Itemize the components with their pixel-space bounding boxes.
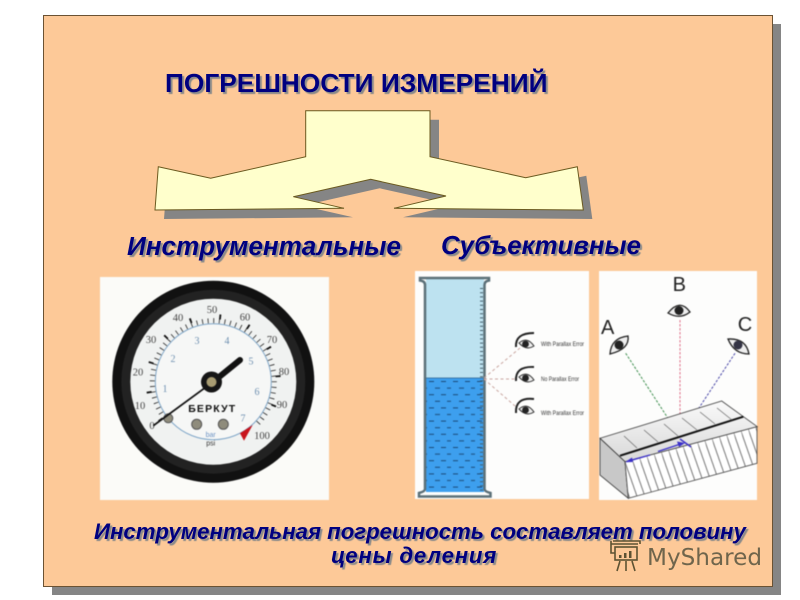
photo: measuring cylinder with parallax: With Parallax Error [541, 411, 584, 417]
photo: pressure gauge: 6 [254, 387, 260, 398]
photo: pressure gauge: 1 [162, 384, 168, 395]
photo: pressure gauge: 70 [267, 335, 277, 346]
note: half of the scale division, line two: цены деления [331, 543, 497, 568]
photo: ruler viewed from three eye positions: B [673, 274, 686, 296]
heading: instrumental: Инструментальные [127, 231, 401, 261]
photo: pressure gauge: 50 [207, 305, 217, 316]
note: half of the scale division, line one: Инструментальная погрешность составляет половину [94, 519, 746, 544]
photo: pressure gauge: 5 [248, 356, 254, 368]
photo: pressure gauge: 2 [170, 354, 176, 365]
photo: pressure gauge: 60 [240, 312, 250, 324]
photo: pressure gauge: bar [206, 432, 216, 439]
photo: measuring cylinder with parallax: No Parallax Error [541, 377, 579, 383]
photo: pressure gauge: 3 [194, 336, 200, 347]
photo: pressure gauge: 4 [224, 336, 230, 347]
photo: pressure gauge: БЕРКУТ [188, 403, 236, 415]
photo: pressure gauge: 30 [146, 335, 156, 346]
watermark: MyShared logo: MyShared [647, 545, 762, 571]
photo: pressure gauge: 20 [133, 368, 143, 378]
photo: ruler viewed from three eye positions: A [601, 317, 615, 339]
photo: pressure gauge: 10 [135, 401, 145, 412]
title: ПОГРЕШНОСТИ ИЗМЕРЕНИЙ [165, 68, 548, 98]
photo: measuring cylinder with parallax: With Parallax Error [541, 342, 584, 348]
heading: subjective: Субъективные [441, 232, 641, 260]
photo: pressure gauge: 90 [277, 400, 287, 411]
photo: ruler viewed from three eye positions: C [738, 314, 752, 336]
photo: pressure gauge: 100 [254, 431, 270, 442]
photo: pressure gauge: 40 [173, 313, 183, 324]
photo: pressure gauge: 80 [279, 367, 289, 378]
photo: pressure gauge: 0 [149, 421, 155, 432]
photo: pressure gauge: psi [206, 440, 216, 448]
photo: pressure gauge: 7 [240, 414, 246, 424]
